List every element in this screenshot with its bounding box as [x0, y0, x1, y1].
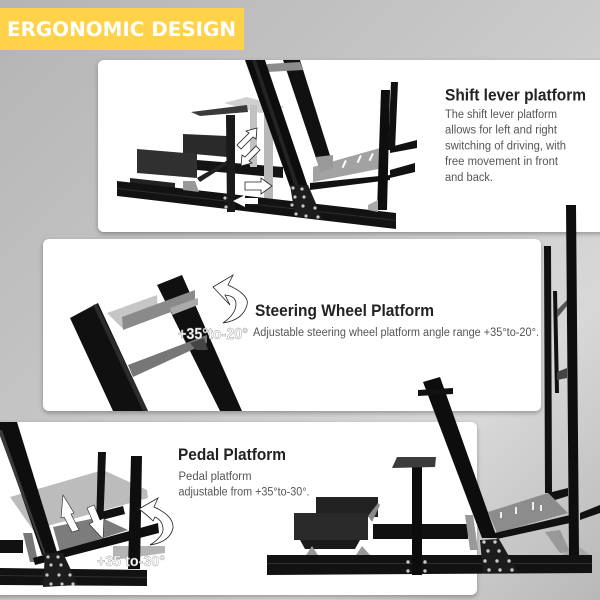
icon: pedal rotation arrow — [139, 498, 173, 545]
heading: shift lever platform: Shift lever platform — [445, 86, 586, 104]
text: shift lever description: free movement in front — [445, 156, 559, 168]
text: pedal description: adjustable from +35°to-30°. — [178, 486, 310, 498]
arrows: shift lever movement — [233, 128, 272, 207]
title banner — [0, 8, 244, 50]
text: shift lever description: The shift lever platform — [445, 109, 557, 121]
angle label: pedal: +35 to-30° — [97, 553, 165, 570]
pedal platform illustration — [0, 422, 165, 587]
text: pedal description: Pedal platform — [178, 471, 252, 483]
angle label: steering: +35°to-20° — [178, 326, 248, 343]
heading: steering wheel platform: Steering Wheel Platform — [255, 302, 434, 320]
full rig illustration — [267, 205, 600, 575]
panel: shift lever platform — [98, 60, 600, 232]
arrows: pedal up and down — [61, 495, 104, 539]
title banner: ERGONOMIC DESIGN — [7, 18, 236, 41]
steering platform illustration — [70, 275, 242, 411]
panel: pedal platform — [0, 422, 477, 595]
text: shift lever description — [445, 109, 566, 184]
text: shift lever description: and back. — [445, 172, 493, 184]
text: pedal description — [178, 471, 310, 498]
text: shift lever description: switching of driving, with — [445, 140, 566, 152]
heading: pedal platform: Pedal Platform — [178, 446, 286, 464]
text: steering description: Adjustable steering wheel platform angle range +35°to-20°. — [253, 327, 539, 339]
icon: steering rotation arrow — [213, 275, 247, 323]
shift lever frame illustration — [117, 60, 417, 229]
text: shift lever description: allows for left and right — [445, 124, 558, 136]
panel: steering wheel platform — [43, 239, 541, 411]
